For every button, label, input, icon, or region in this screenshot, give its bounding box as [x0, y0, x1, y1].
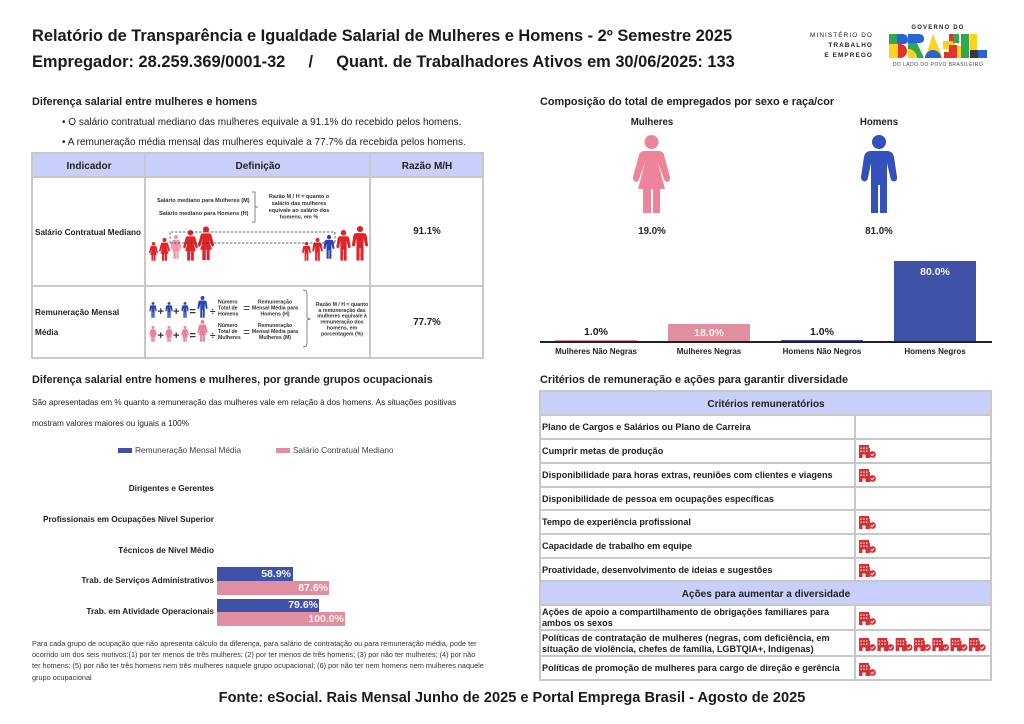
row 2 definition diagram: + — [173, 330, 179, 342]
bullet 2: • A remuneração média mensal das mulheres equivale a 77.7% da recebida pelos homens. — [62, 137, 466, 148]
bar: mulheres não negras — [555, 340, 637, 342]
row 2 definition diagram: Homens (H) — [260, 312, 290, 318]
bar: mulheres negras: 18.0% — [694, 327, 724, 339]
logo: ministério — [810, 31, 873, 59]
row 2 definition diagram: remuneração dos — [320, 320, 364, 326]
label: homens: Homens — [860, 116, 898, 128]
bars: atividade operacionais — [217, 599, 345, 626]
row 2 label — [32, 286, 146, 359]
axis — [540, 341, 992, 343]
heading: Composição do total de empregados por sexo e raça/cor — [540, 96, 834, 108]
heading: Diferença salarial entre homens e mulheres, por grande grupos ocupacionais — [32, 374, 433, 386]
value: mulheres: 19.0% — [638, 226, 666, 236]
row 1 label: Salário Contratual Mediano — [35, 228, 141, 236]
source footer: Fonte: eSocial. Rais Mensal Junho de 2025 e Portal Emprega Brasil - Agosto de 2025 — [219, 690, 805, 706]
row: contratação — [539, 631, 992, 655]
bar chart — [540, 261, 992, 356]
row 2 definition diagram: Número — [218, 323, 238, 329]
row 2 definition diagram: Total de — [218, 306, 238, 312]
panel: composição — [540, 96, 992, 356]
row 2 definition diagram: Mensal Média para — [252, 329, 298, 335]
row 1 definition diagram: salário das mulheres — [272, 201, 326, 207]
category labels: Dirigentes e Gerentes — [129, 484, 214, 492]
value: homens: 81.0% — [865, 226, 893, 236]
employer line: Empregador: 28.259.369/0001-32 / Quant. de Trabalhadores Ativos em 30/06/2025: 133 — [32, 52, 735, 70]
row: equipe — [539, 535, 992, 557]
row: promoção — [539, 657, 992, 681]
row 2 label: Média — [35, 328, 58, 337]
row: experiência — [539, 511, 992, 533]
row 2 definition diagram: Mulheres — [218, 335, 241, 341]
row 2 label: Remuneração Mensal — [35, 308, 119, 317]
logo: ministério: E EMPREGO — [824, 52, 873, 59]
row 2 definition diagram: mulheres equivale à — [317, 314, 367, 320]
row 2 definition diagram: Remuneração — [258, 323, 292, 329]
row 1 value — [370, 177, 484, 287]
row 1 definition diagram: Razão M / H = quanto o — [269, 194, 330, 200]
panel: diferença salarial — [31, 96, 484, 359]
icon: man — [861, 135, 897, 213]
category: homens não negros: Homens Não Negros — [783, 347, 861, 356]
row: apoio: Ações de apoio a compartilhamento de obrigações familiares para ambos os sexos — [542, 607, 829, 628]
category: mulheres negras: Mulheres Negras — [677, 347, 741, 356]
row 2 definition diagram: Total de — [218, 329, 238, 335]
category labels: Trab. em Atividade Operacionais — [86, 607, 214, 616]
row 2 definition diagram: = — [190, 330, 196, 342]
row: horas extras: Disponibilidade para horas extras, reuniões com clientes e viagens — [542, 470, 833, 480]
row 2 definition diagram: = — [243, 325, 250, 339]
panel: diferença por grupos ocupacionais — [32, 374, 484, 682]
table header: razão — [370, 153, 484, 178]
row 2 definition diagram: ÷ — [210, 307, 216, 318]
row 2 definition diagram: Razão M / H = quanto — [316, 302, 368, 308]
row 2 definition diagram: + — [173, 306, 179, 318]
bar: mulheres negras — [668, 324, 750, 342]
row: disponibilidade — [539, 488, 992, 509]
bar: homens negros: 80.0% — [920, 266, 950, 278]
row: equipe: Capacidade de trabalho em equipe — [542, 541, 692, 551]
category labels: Trab. de Serviços Administrativos — [81, 576, 214, 585]
heading: Critérios de remuneração e ações para garantir diversidade — [540, 374, 848, 386]
row 2 definition diagram — [145, 286, 371, 359]
footnote: ocorrido um dos seis motivos:(1) por ter menos de três mulheres; (2) por ter menos de três homens; (3) por não ter mulheres; (4) por não — [32, 650, 475, 659]
title: Relatório de Transparência e Igualdade Salarial de Mulheres e Homens - 2º Semestre 2025 — [32, 26, 732, 44]
logo: governo do brasil: DO LADO DO POVO BRASILEIRO — [893, 62, 983, 68]
table header: definição — [145, 153, 371, 178]
row 2 value: 77.7% — [413, 317, 441, 328]
row 2 definition diagram: Mensal Média para — [252, 306, 298, 312]
table header: razão: Razão M/H — [402, 161, 452, 172]
row 1 value: 91.1% — [413, 226, 441, 237]
row 1 definition diagram — [145, 177, 371, 287]
description — [32, 398, 456, 428]
description: São apresentadas em % quanto a remuneração das mulheres vale em relação à dos homens. As situações positivas — [32, 398, 456, 406]
row 1 definition diagram: equivale ao salário dos — [269, 208, 329, 214]
icon: woman — [633, 135, 670, 213]
row: plano de cargos — [539, 416, 992, 438]
header: critérios remuneratórios — [540, 391, 992, 416]
row 2 definition diagram: Mulheres (M) — [259, 335, 291, 341]
row 2 definition diagram: + — [158, 306, 164, 318]
row 2 definition diagram: Homens — [218, 312, 239, 318]
row: horas extras — [539, 464, 992, 486]
legend: Salário Contratual Mediano — [293, 445, 394, 455]
row 2 definition diagram: Remuneração — [258, 300, 292, 306]
bars: serviços administrativos: 58.9% — [261, 568, 291, 580]
panel: critérios — [539, 374, 992, 681]
label: mulheres: Mulheres — [631, 116, 673, 128]
value 1.0%: 1.0% — [584, 326, 608, 338]
header: ações — [540, 581, 992, 606]
category labels: Profissionais em Ocupações Nível Superior — [43, 514, 214, 524]
category: homens negros: Homens Negros — [904, 347, 966, 356]
bullet 1: • O salário contratual mediano das mulheres equivale a 91.1% do recebido pelos homens. — [62, 117, 461, 128]
logo: ministério: MINISTÉRIO DO — [810, 32, 873, 39]
logo: ministério: TRABALHO — [828, 42, 873, 49]
bars: atividade operacionais: 79.6% — [288, 599, 318, 611]
row: metas — [539, 440, 992, 462]
bars: serviços administrativos: 87.6% — [298, 582, 328, 594]
heading: Diferença salarial entre mulheres e homens — [32, 96, 257, 108]
row 1 definition diagram: homens, em % — [280, 214, 318, 220]
row: proatividade: Proatividade, desenvolvimento de ideias e sugestões — [542, 564, 772, 574]
row: plano de cargos: Plano de Cargos e Salários ou Plano de Carreira — [542, 422, 751, 432]
category: mulheres não negras: Mulheres Não Negras — [555, 347, 637, 356]
logo: governo do brasil — [889, 24, 987, 68]
row 2 definition diagram: homens, em — [327, 326, 358, 332]
legend — [118, 445, 394, 455]
footnote: ter homens; (5) por não ter três homens nem três mulheres naquele grupo ocupacional; (6) por não ter nem homens nem mulheres naquele — [32, 661, 484, 670]
category labels: Técnicos de Nível Médio — [118, 546, 214, 555]
row: promoção: Políticas de promoção de mulheres para cargo de direção e gerência — [542, 663, 840, 673]
header: critérios remuneratórios: Critérios remuneratórios — [707, 399, 825, 410]
bar: homens negros — [894, 261, 976, 342]
row: disponibilidade: Disponibilidade de pessoa em ocupações específicas — [542, 494, 774, 504]
value 1.0%: 1.0% — [810, 326, 834, 338]
table header: definição: Definição — [235, 161, 280, 172]
row 2 definition diagram: a remuneração das — [318, 308, 366, 314]
row: contratação: Políticas de contratação de mulheres (negras, com deficiência, em situação de violência, chefes de família, LGBTQIA+, Indígenas) — [542, 632, 830, 654]
bars: serviços administrativos — [217, 567, 329, 595]
row 1 definition diagram: Salário mediano para Homens (H) — [159, 211, 249, 217]
row 1 label — [32, 177, 146, 287]
row 2 definition diagram: ÷ — [210, 331, 216, 342]
row 2 definition diagram: Número — [218, 300, 238, 306]
header: ações: Ações para aumentar a diversidade — [682, 589, 850, 600]
footnote — [32, 639, 484, 682]
row: metas: Cumprir metas de produção — [542, 446, 663, 456]
row 2 definition diagram: porcentagem (%) — [321, 332, 363, 338]
row 2 value — [370, 286, 484, 359]
row 2 definition diagram: = — [190, 306, 196, 318]
row 1 definition diagram: Salário mediano para Mulheres (M) — [157, 198, 250, 204]
row: proatividade — [539, 559, 992, 580]
row 2 definition diagram: = — [243, 301, 250, 315]
bar: homens não negros — [781, 340, 863, 342]
bars: atividade operacionais: 100.0% — [308, 613, 344, 625]
footnote: grupo ocupacional — [32, 673, 92, 682]
row: experiência: Tempo de experiência profissional — [542, 517, 691, 527]
table header: indicador — [32, 153, 146, 178]
table header: indicador: Indicador — [66, 161, 112, 172]
description: mostram valores maiores ou iguais a 100% — [32, 418, 189, 428]
legend: Remuneração Mensal Média — [135, 445, 241, 455]
logo: governo do brasil: GOVERNO DO — [911, 24, 965, 30]
row: apoio — [539, 606, 992, 629]
row 2 definition diagram: + — [158, 330, 164, 342]
footnote: Para cada grupo de ocupação que não apresenta cálculo da diferença, para salário de contratação ou para remuneração média, pode ter — [32, 639, 477, 648]
category labels — [43, 484, 214, 616]
